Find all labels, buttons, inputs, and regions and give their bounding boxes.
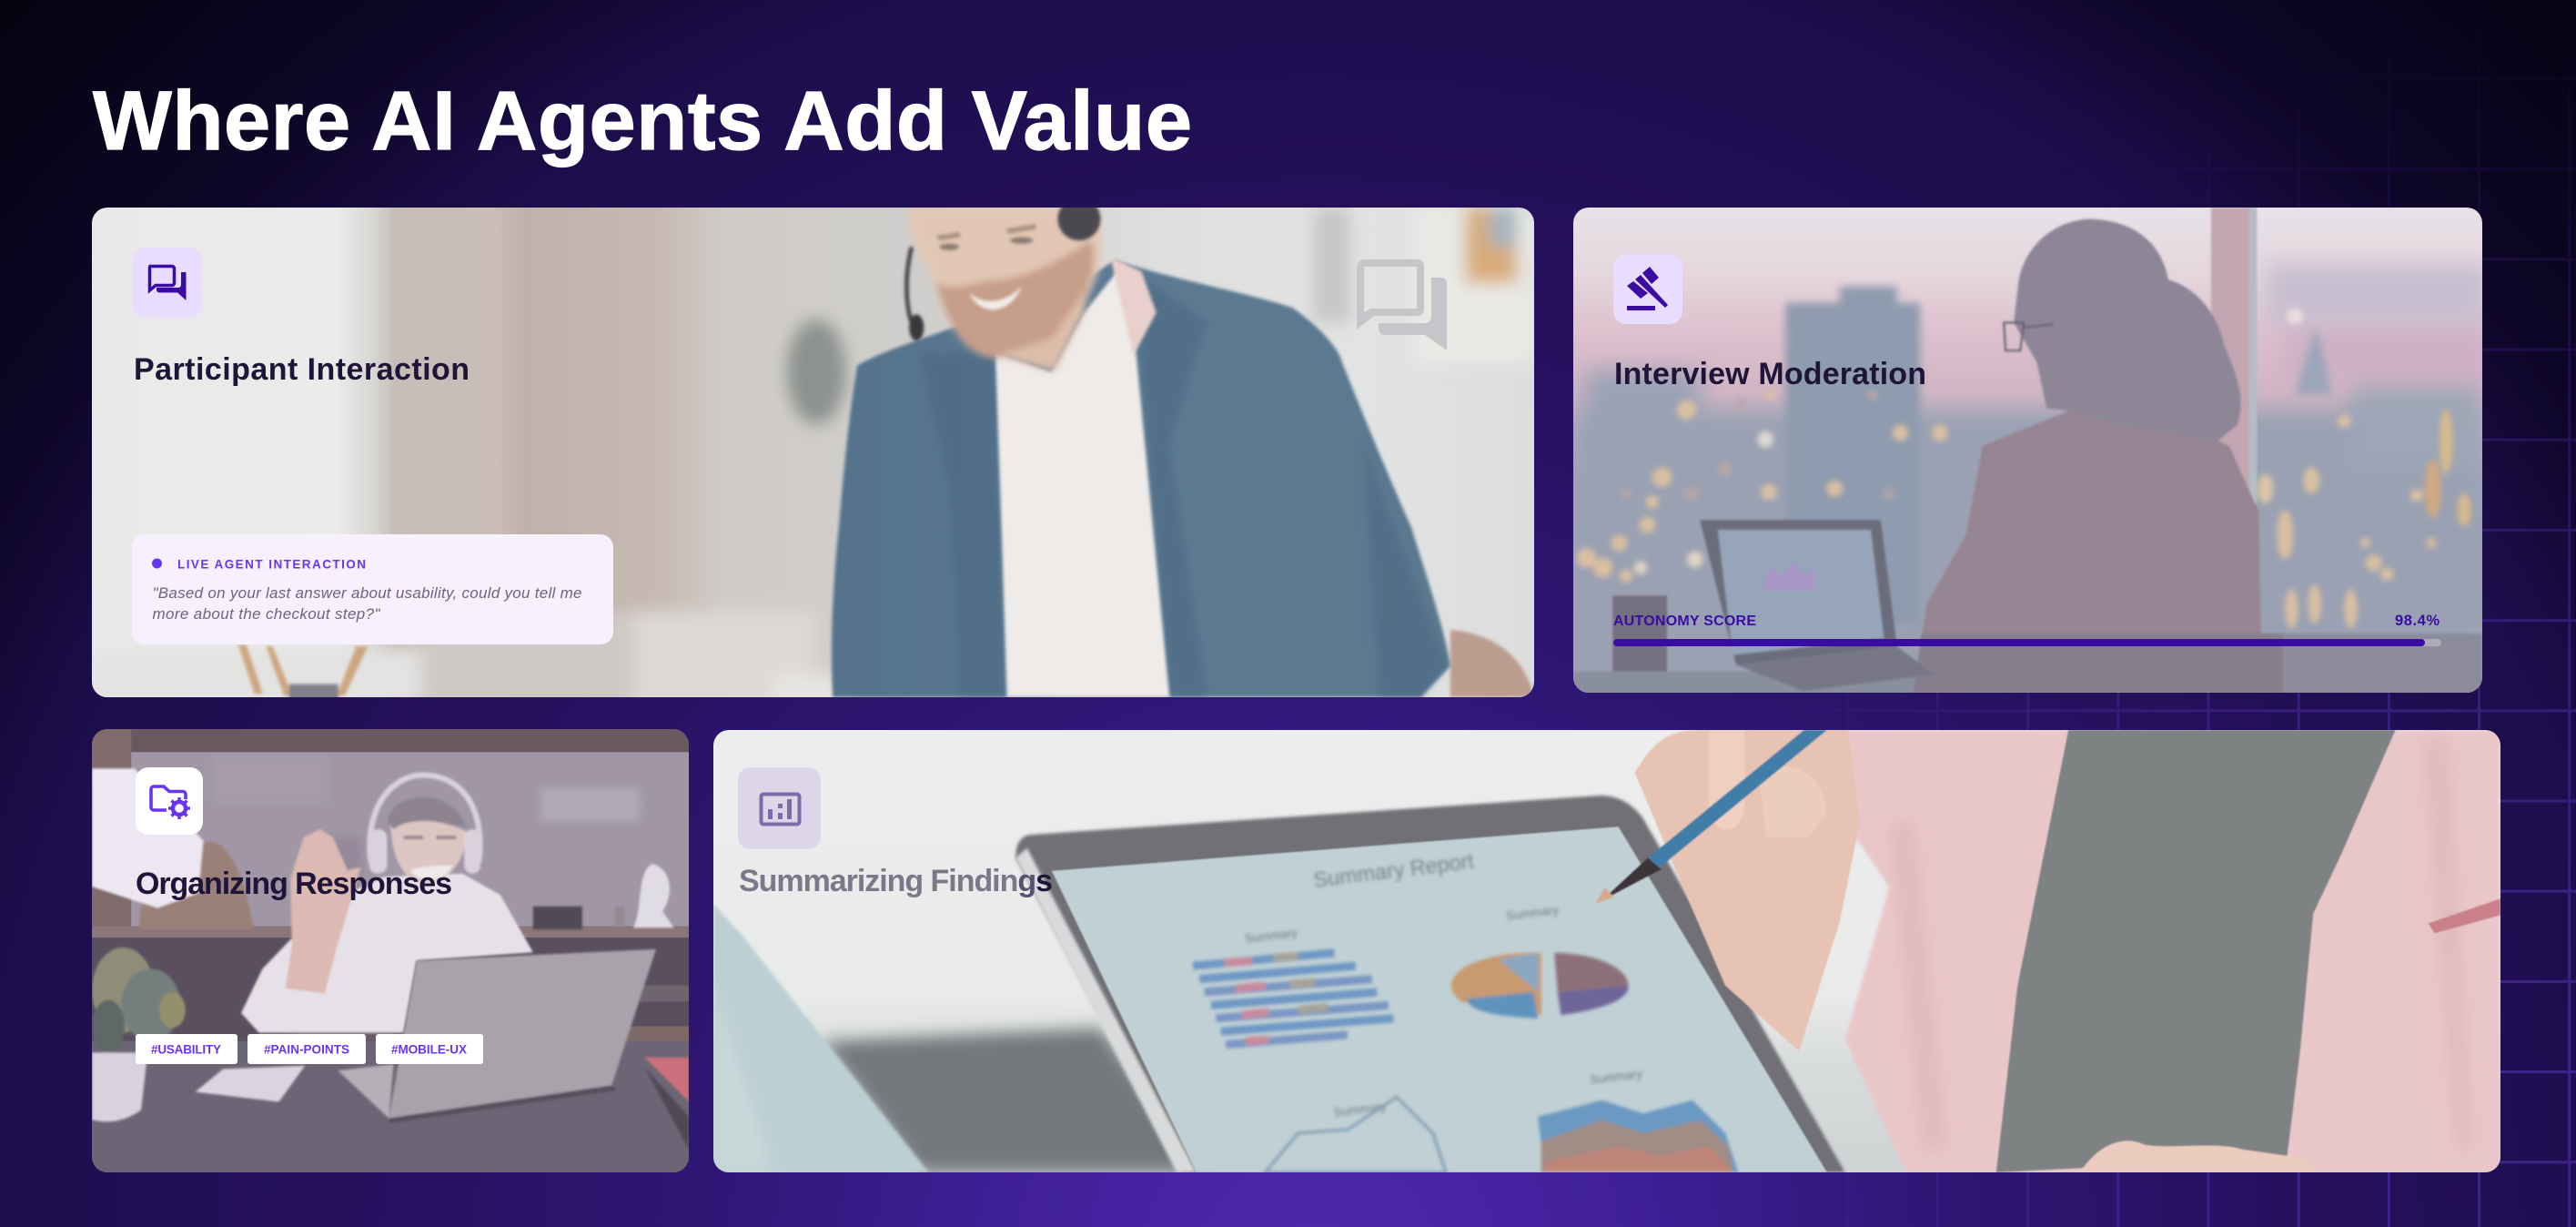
photo: hand with pen over tablet report: Summary bbox=[1333, 1100, 1387, 1120]
suit bbox=[832, 260, 1450, 697]
bar chart in photo bbox=[1193, 953, 1393, 1045]
lampshade bbox=[92, 768, 204, 908]
woman bbox=[1914, 219, 2262, 693]
dark table band bbox=[822, 1029, 1207, 1172]
bokeh lights bbox=[1577, 308, 2470, 629]
photo: man with headset at desk bbox=[92, 208, 1534, 697]
photo: hand with pen over tablet report: Summary Report bbox=[1312, 848, 1476, 892]
chair bbox=[1450, 630, 1534, 697]
face bbox=[908, 208, 1102, 372]
panel: organizing responses bbox=[92, 729, 689, 1172]
status dot bbox=[152, 559, 162, 568]
callout quote: more about the checkout step?" bbox=[153, 605, 380, 623]
lapel shading bbox=[920, 271, 1446, 697]
dark top bbox=[1996, 730, 2395, 1172]
pencil cup bbox=[238, 644, 368, 701]
autonomy score bar bbox=[1613, 613, 2441, 646]
overlay: labels and icons bbox=[136, 767, 483, 1064]
panel: interview moderation bbox=[1573, 208, 2482, 693]
laptop bbox=[196, 949, 689, 1150]
icon: gavel bbox=[1613, 254, 1682, 324]
overlay: labels and icons bbox=[738, 767, 1053, 898]
fabric folds bbox=[1889, 740, 2472, 1150]
callout quote: "Based on your last answer about usability, could you tell me bbox=[153, 584, 582, 602]
plant and pot bbox=[92, 948, 186, 1121]
overlay: labels and icons bbox=[132, 248, 1447, 644]
score label: AUTONOMY SCORE bbox=[1613, 614, 1756, 629]
photo: hand with pen over tablet report bbox=[713, 730, 2500, 1172]
laptop bbox=[1573, 520, 2482, 695]
pen in pocket bbox=[2429, 898, 2500, 933]
photo: woman overlooking city at dusk bbox=[1573, 208, 2482, 693]
lower hand bbox=[2080, 1141, 2317, 1172]
woman bbox=[241, 776, 533, 1033]
shelf objects bbox=[139, 842, 674, 929]
tablet frame bbox=[1015, 796, 1845, 1172]
tag: pain points: #PAIN-POINTS bbox=[264, 1043, 349, 1056]
callout: live agent interaction bbox=[132, 534, 613, 644]
heading: participant interaction: Participant Interaction bbox=[134, 352, 470, 387]
window column bbox=[2211, 208, 2252, 503]
panel: summarizing findings bbox=[713, 730, 2500, 1172]
icon: ghost chat bubbles bbox=[1357, 259, 1447, 350]
heading: summarizing findings: Summarizing Findings bbox=[739, 864, 1053, 898]
tag: mobile ux bbox=[376, 1034, 483, 1064]
callout label: LIVE AGENT INTERACTION bbox=[177, 557, 366, 572]
hand with pen bbox=[1595, 730, 1860, 1051]
score value: 98.4% bbox=[2395, 613, 2440, 629]
tag: mobile ux: #MOBILE-UX bbox=[391, 1043, 467, 1056]
tag: usability bbox=[136, 1034, 237, 1064]
foreground blurred tablet bbox=[713, 904, 928, 1172]
tag: pain points bbox=[247, 1034, 366, 1064]
callout quote bbox=[153, 584, 582, 623]
title: Where AI Agents Add Value bbox=[93, 75, 1192, 167]
photo: hand with pen over tablet report: Summary bbox=[1589, 1067, 1643, 1087]
icon: chat bubbles bbox=[132, 248, 202, 318]
shirt bbox=[995, 263, 1169, 697]
area chart in photo bbox=[1538, 1100, 1738, 1172]
panel: participant interaction bbox=[92, 208, 1534, 697]
icon: bar chart box bbox=[738, 767, 821, 849]
pie chart in photo bbox=[1451, 953, 1541, 1015]
tags bbox=[136, 1034, 483, 1064]
heading: organizing responses: Organizing Responses bbox=[136, 867, 452, 901]
overlay: labels and icons bbox=[1613, 254, 2441, 646]
icon: folder with gear bbox=[136, 767, 203, 835]
photo: hand with pen over tablet report: Summary bbox=[1505, 903, 1560, 923]
building bbox=[1785, 287, 1920, 625]
heading: interview moderation: Interview Moderation bbox=[1614, 357, 1926, 391]
photo: woman waving at laptop bbox=[92, 729, 689, 1172]
blazer bbox=[1797, 730, 2500, 1172]
photo: hand with pen over tablet report: Summary bbox=[1244, 926, 1298, 946]
tablet screen bbox=[1052, 826, 1827, 1172]
tag: usability: #USABILITY bbox=[151, 1043, 221, 1056]
